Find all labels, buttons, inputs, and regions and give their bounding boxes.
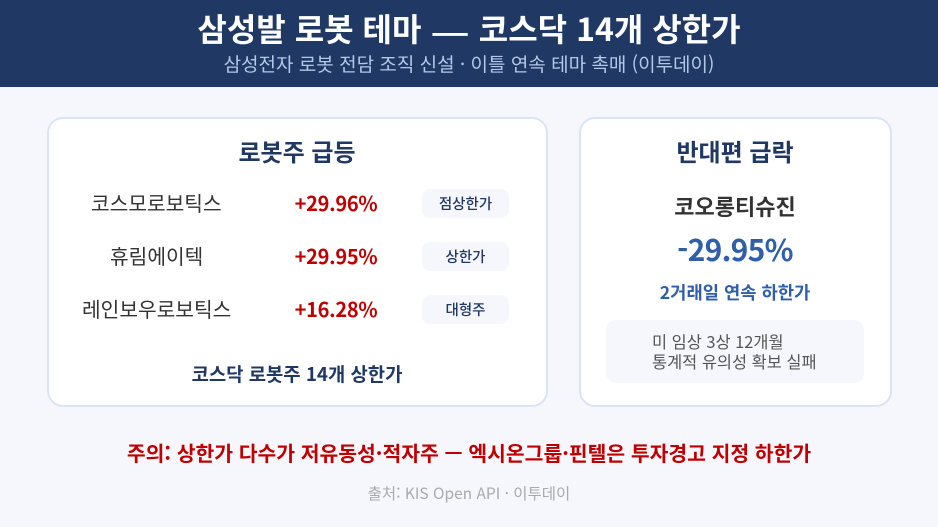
panel: robot stocks surge bbox=[47, 117, 548, 407]
row 1 name: 코스모로보틱스 bbox=[91, 187, 222, 217]
row 2 tag: 상한가 bbox=[445, 246, 486, 267]
note box bbox=[606, 320, 864, 383]
row 1 percent: +29.96% bbox=[295, 188, 377, 217]
big percent: -29.95% bbox=[677, 226, 793, 270]
title: 삼성발 로봇 테마 — 코스닥 14개 상한가 bbox=[197, 0, 741, 64]
row 3 tag bbox=[422, 295, 509, 324]
panel heading: opposite side: 반대편 급락 bbox=[676, 133, 794, 168]
row 3 name: 레인보우로보틱스 bbox=[82, 293, 231, 323]
stock name: 코오롱티슈진 bbox=[674, 190, 796, 222]
source: 출처: KIS Open API · 이투데이 bbox=[368, 482, 570, 504]
row 2 name: 휴림에이텍 bbox=[110, 240, 203, 270]
subtitle: 삼성전자 로봇 전담 조직 신설 · 이틀 연속 테마 촉매 (이투데이) bbox=[224, 50, 714, 77]
row 2 tag bbox=[422, 242, 509, 271]
panel: opposite plunge bbox=[579, 117, 892, 407]
row 1 tag: 점상한가 bbox=[439, 193, 492, 214]
row 3 tag: 대형주 bbox=[445, 299, 486, 320]
panel heading: robot stocks: 로봇주 급등 bbox=[238, 133, 356, 168]
row 2 percent: +29.95% bbox=[295, 241, 377, 270]
header banner bbox=[0, 0, 938, 87]
warning: 주의: 상한가 다수가 저유동성·적자주 — 엑시온그룹·핀텔은 투자경고 지정 하한가 bbox=[127, 437, 811, 467]
row 1 tag bbox=[422, 189, 509, 218]
row 3 percent: +16.28% bbox=[295, 294, 377, 323]
limit down note: 2거래일 연속 하한가 bbox=[660, 279, 810, 305]
note text: 통계적 유의성 확보 실패 bbox=[652, 349, 817, 373]
panel footer: kosdaq count: 코스닥 로봇주 14개 상한가 bbox=[192, 360, 402, 387]
note text bbox=[652, 329, 817, 373]
note text: 미 임상 3상 12개월 bbox=[652, 329, 784, 353]
